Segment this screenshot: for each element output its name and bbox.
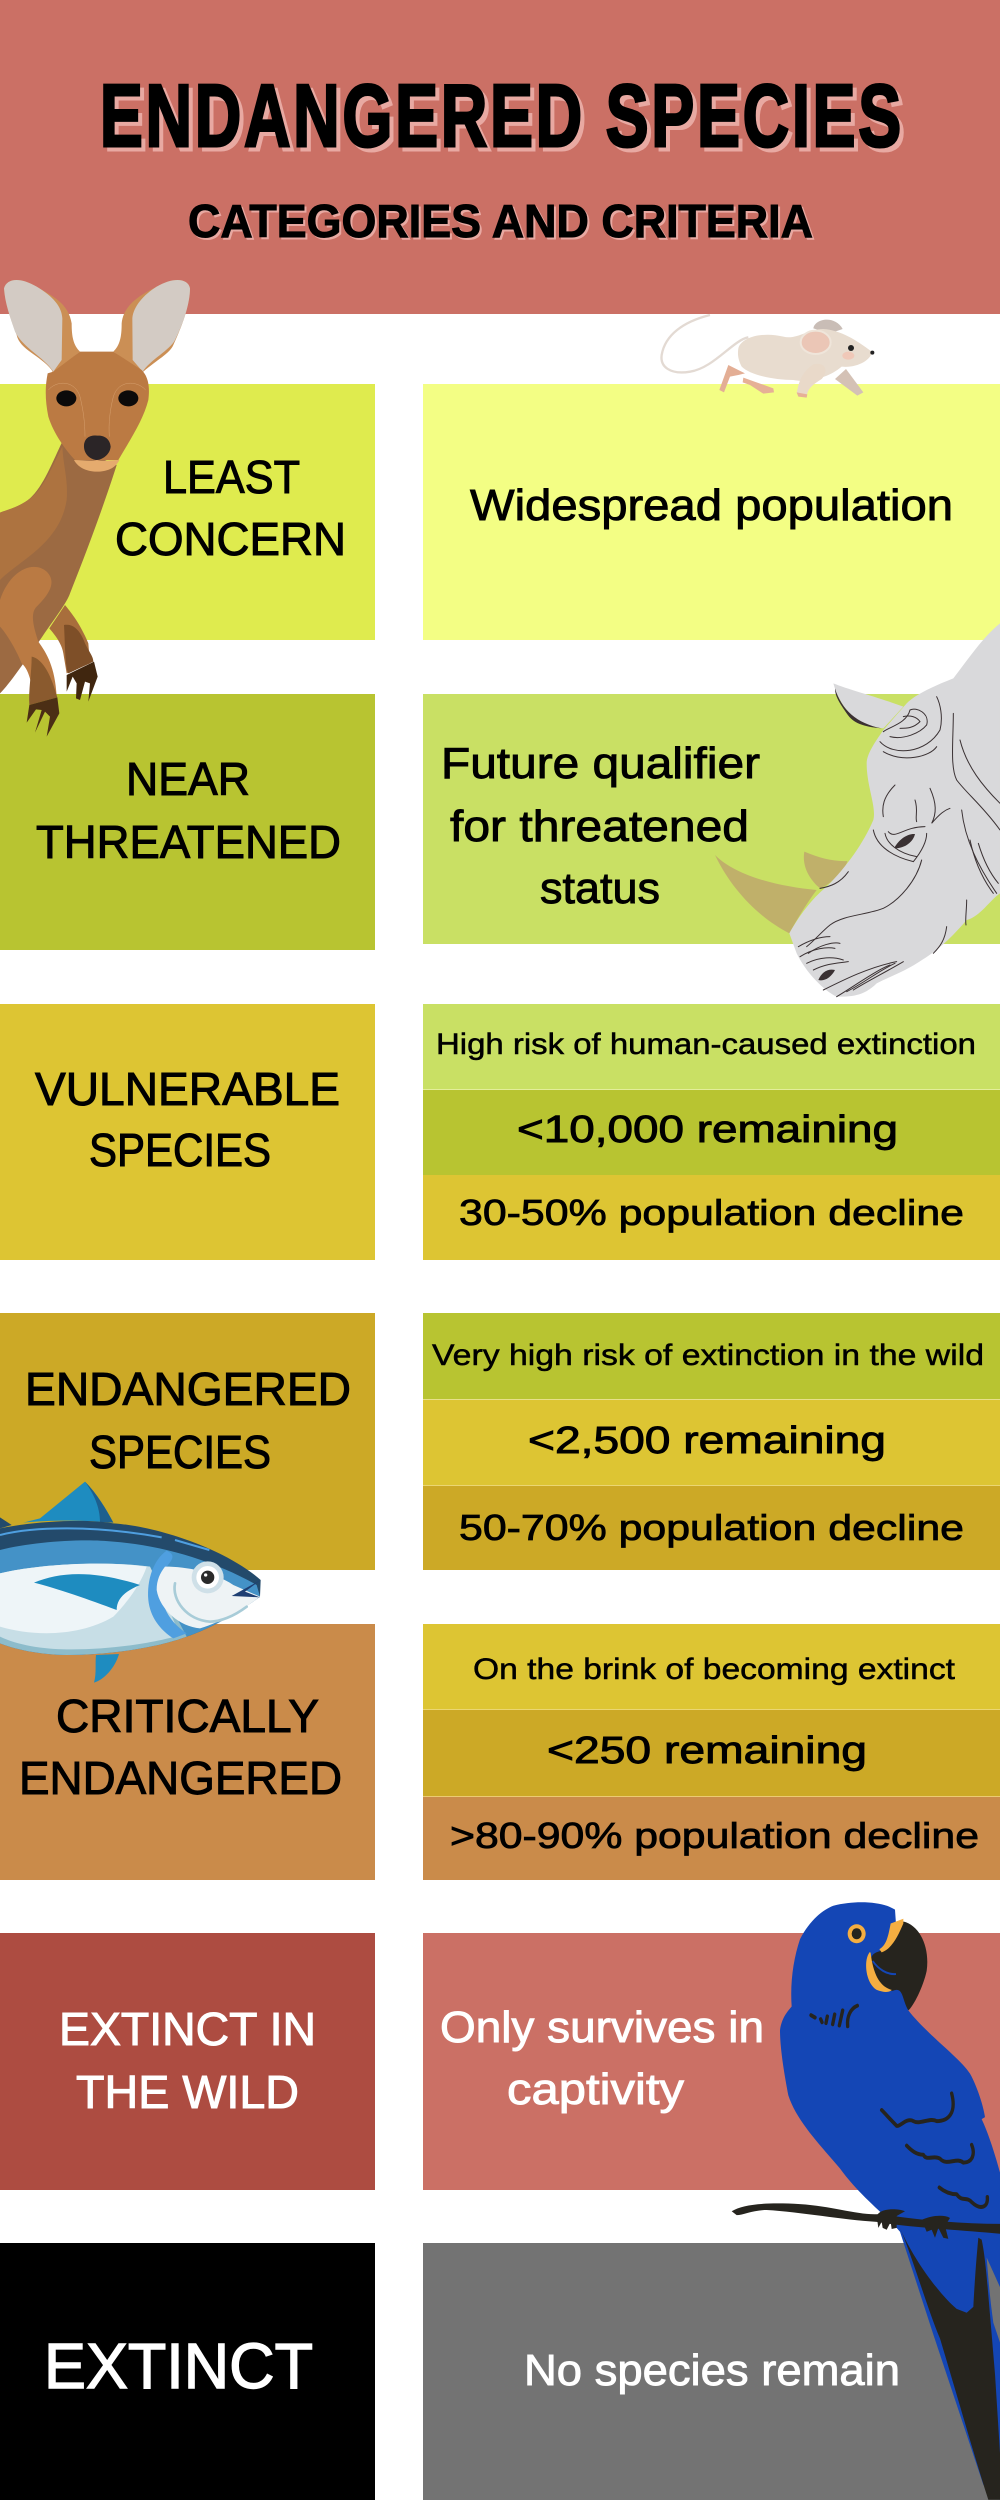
icon: kangaroo <box>0 280 190 737</box>
panel: near threatened criteria: status <box>540 864 660 913</box>
panel: least concern category: CONCERN <box>115 513 346 565</box>
panel: near threatened criteria: for threatened <box>450 802 749 851</box>
panel: least concern category <box>0 384 375 640</box>
panel: extinct in the wild category: THE WILD <box>76 2066 299 2118</box>
panel: near threatened category <box>0 694 375 950</box>
subtitle: CATEGORIES AND CRITERIA <box>190 197 815 249</box>
panel: critically endangered category: CRITICALLY <box>56 1690 319 1742</box>
panel: vulnerable species category <box>0 1004 375 1260</box>
panel: extinct criteria <box>423 2243 1000 2500</box>
panel: extinct criteria: No species remain <box>524 2346 900 2395</box>
panel: endangered species criteria <box>423 1313 1000 1570</box>
panel: critically endangered category <box>0 1624 375 1880</box>
panel: extinct category: EXTINCT <box>44 2330 313 2402</box>
panel: extinct in the wild criteria: Only survives in <box>440 2003 764 2052</box>
panel: header <box>0 0 1000 314</box>
panel: endangered species category: ENDANGERED <box>25 1363 351 1415</box>
panel: vulnerable species criteria: High risk of human-caused extinction <box>436 1028 976 1061</box>
panel: extinct in the wild category: EXTINCT IN <box>59 2003 316 2055</box>
panel: vulnerable species category: VULNERABLE <box>35 1063 340 1115</box>
panel: extinct category <box>0 2243 375 2500</box>
panel: endangered species category: SPECIES <box>89 1426 271 1478</box>
panel: near threatened category: NEAR <box>126 753 250 805</box>
panel: near threatened criteria: Future qualifier <box>441 739 760 788</box>
panel: endangered species criteria: Very high risk of extinction in the wild <box>432 1339 984 1372</box>
panel: critically endangered category: ENDANGERED <box>19 1752 342 1804</box>
icon: mouse <box>661 315 874 398</box>
panel: near threatened criteria <box>423 694 1000 944</box>
panel: least concern criteria <box>423 384 1000 640</box>
icon: rhino <box>715 623 1000 997</box>
panel: least concern criteria: Widespread population <box>470 481 953 530</box>
subtitle: CATEGORIES AND CRITERIA <box>188 195 813 247</box>
panel: endangered species criteria: 50-70% population decline <box>459 1507 964 1548</box>
panel: extinct in the wild category <box>0 1933 375 2190</box>
panel: near threatened category: THREATENED <box>36 816 341 868</box>
panel: extinct in the wild criteria <box>423 1933 1000 2190</box>
panel: vulnerable species criteria: <10,000 remaining <box>517 1109 898 1151</box>
panel: critically endangered criteria: On the brink of becoming extinct <box>473 1653 956 1686</box>
panel: vulnerable species criteria <box>423 1004 1000 1260</box>
panel: critically endangered criteria <box>423 1624 1000 1880</box>
panel: endangered species criteria: <2,500 remaining <box>528 1420 886 1462</box>
panel: extinct in the wild criteria: captivity <box>507 2065 684 2114</box>
panel: least concern category: LEAST <box>163 451 300 503</box>
icon: blue macaw on branch <box>732 1902 1000 2500</box>
panel: endangered species category <box>0 1313 375 1570</box>
panel: vulnerable species category: SPECIES <box>89 1124 271 1176</box>
icon: tuna fish <box>0 1482 261 1683</box>
panel: vulnerable species criteria: 30-50% population decline <box>459 1192 964 1233</box>
panel: critically endangered criteria: <250 remaining <box>547 1730 867 1772</box>
panel: critically endangered criteria: >80-90% population decline <box>450 1815 979 1856</box>
